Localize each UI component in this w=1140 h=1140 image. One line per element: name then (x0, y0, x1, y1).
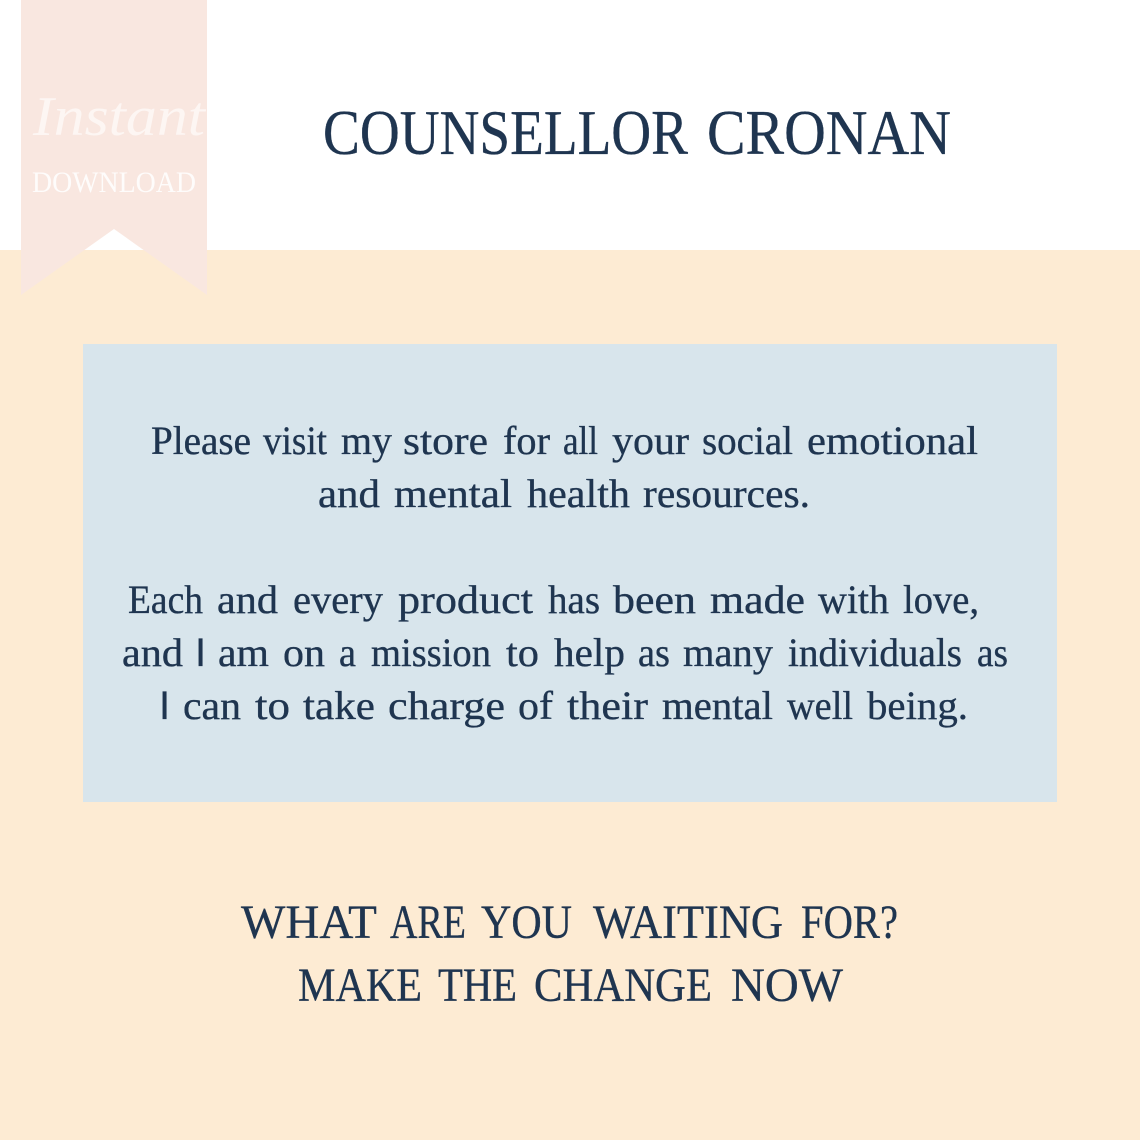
call to action: NOW (731, 959, 844, 1012)
call to action: MAKE (298, 959, 422, 1012)
text block: store message: Please (151, 418, 251, 463)
call to action: CHANGE (534, 959, 712, 1012)
text block: store message: I (195, 631, 206, 675)
text block: store message: mental (394, 471, 512, 516)
text block: store message: emotional (807, 418, 978, 463)
call to action: WAITING (593, 896, 783, 949)
text block: store message: as (977, 630, 1008, 675)
text block: store message: on (283, 630, 325, 675)
text block: store message: many (683, 630, 773, 675)
text block: store message: well (787, 683, 853, 728)
call to action (241, 896, 898, 1012)
text block: store message: with (818, 577, 889, 622)
text block: store message: for (503, 418, 550, 463)
call to action: ARE (390, 896, 466, 949)
text block: store message: take (303, 683, 375, 728)
title: CRONAN (707, 98, 951, 168)
text block: store message: love, (903, 577, 979, 622)
text block: store message: and (318, 471, 380, 516)
text block: store message: as (638, 630, 670, 675)
text block: store message: my (341, 418, 392, 463)
text block: store message: product (398, 577, 533, 622)
text block: store message: every (293, 577, 383, 622)
title: COUNSELLOR (323, 98, 688, 168)
call to action: YOU (481, 896, 572, 949)
text block: store message: and (122, 630, 183, 675)
text block: store message: being. (867, 683, 968, 728)
ribbon shape (21, 0, 207, 295)
ribbon script text: Instant (32, 86, 207, 148)
text block: store message: made (710, 577, 805, 622)
text block: store message: health (527, 471, 630, 516)
text block: store message: help (554, 630, 625, 675)
text block: store message: and (217, 577, 278, 622)
call to action: THE (438, 959, 517, 1012)
text block: store message: am (218, 630, 269, 675)
text block: store message: visit (263, 418, 327, 463)
text block: store message: of (518, 683, 554, 728)
panel: store message (83, 344, 1057, 802)
text block: store message: resources. (643, 471, 810, 516)
ribbon badge: instant download (21, 0, 207, 295)
text block: store message: mission (371, 630, 491, 675)
text block: store message: Each (128, 577, 203, 622)
text block: store message (122, 418, 1008, 728)
cream background panel (0, 250, 1140, 1140)
text block: store message: to (255, 683, 290, 728)
call to action: WHAT (241, 896, 377, 949)
text block: store message: mental (662, 683, 773, 728)
call to action: FOR? (801, 896, 898, 949)
text block: store message: a (339, 630, 356, 675)
text block: store message: been (613, 577, 696, 622)
text block: store message: store (403, 418, 488, 463)
text block: store message: social (702, 418, 793, 463)
text block: store message: I (159, 684, 170, 728)
text block: store message: their (567, 683, 648, 728)
text block: store message: has (548, 577, 600, 622)
ribbon caps text: DOWNLOAD (32, 166, 196, 199)
text block: store message: all (563, 418, 598, 463)
text block: store message: charge (388, 683, 505, 728)
text block: store message: can (183, 683, 241, 728)
text block: store message: to (506, 630, 539, 675)
text block: store message: your (612, 418, 689, 463)
text block: store message: individuals (788, 630, 962, 675)
